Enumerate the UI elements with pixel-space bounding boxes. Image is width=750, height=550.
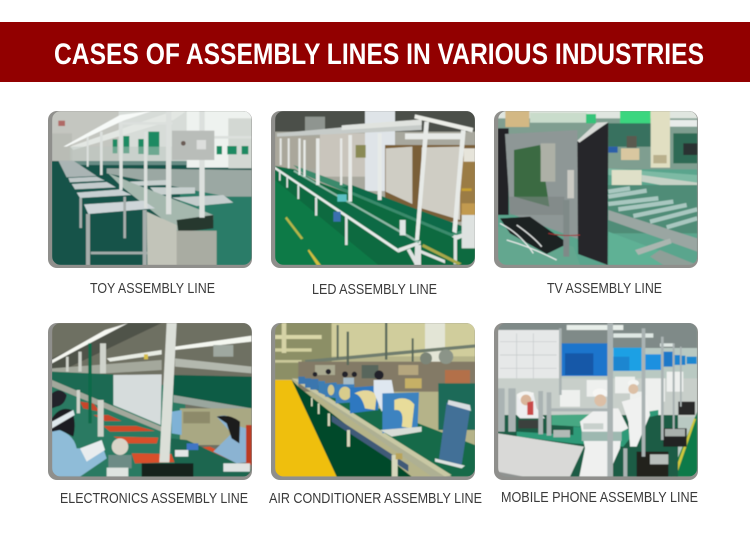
photo: toy assembly line — [52, 111, 252, 265]
panel: mobile phone assembly line — [494, 323, 698, 506]
label: mobile phone assembly line: MOBILE PHONE ASSEMBLY LINE — [501, 489, 698, 506]
photo: electronics assembly line — [52, 323, 252, 477]
panel: TV assembly line — [494, 111, 698, 297]
photo: air conditioner assembly line — [275, 323, 475, 477]
panel: toy assembly line — [48, 111, 252, 297]
panel: air conditioner assembly line — [269, 323, 482, 507]
photo backing — [48, 323, 252, 480]
photo backing — [494, 323, 698, 480]
photo backing — [271, 111, 475, 268]
label: air conditioner assembly line: AIR CONDITIONER ASSEMBLY LINE — [269, 490, 482, 507]
photo: TV assembly line — [498, 111, 697, 265]
label: electronics assembly line: ELECTRONICS ASSEMBLY LINE — [60, 490, 248, 507]
label: toy assembly line: TOY ASSEMBLY LINE — [90, 280, 215, 297]
photo: mobile phone assembly line — [498, 323, 697, 477]
panel: electronics assembly line — [48, 323, 252, 507]
photo: LED assembly line — [275, 111, 475, 265]
photo backing — [271, 323, 475, 480]
panel: LED assembly line — [271, 111, 475, 298]
label: TV assembly line: TV ASSEMBLY LINE — [547, 280, 662, 297]
photo backing — [494, 111, 698, 268]
title banner — [0, 22, 750, 82]
label: LED assembly line: LED ASSEMBLY LINE — [312, 281, 437, 298]
photo backing — [48, 111, 252, 268]
